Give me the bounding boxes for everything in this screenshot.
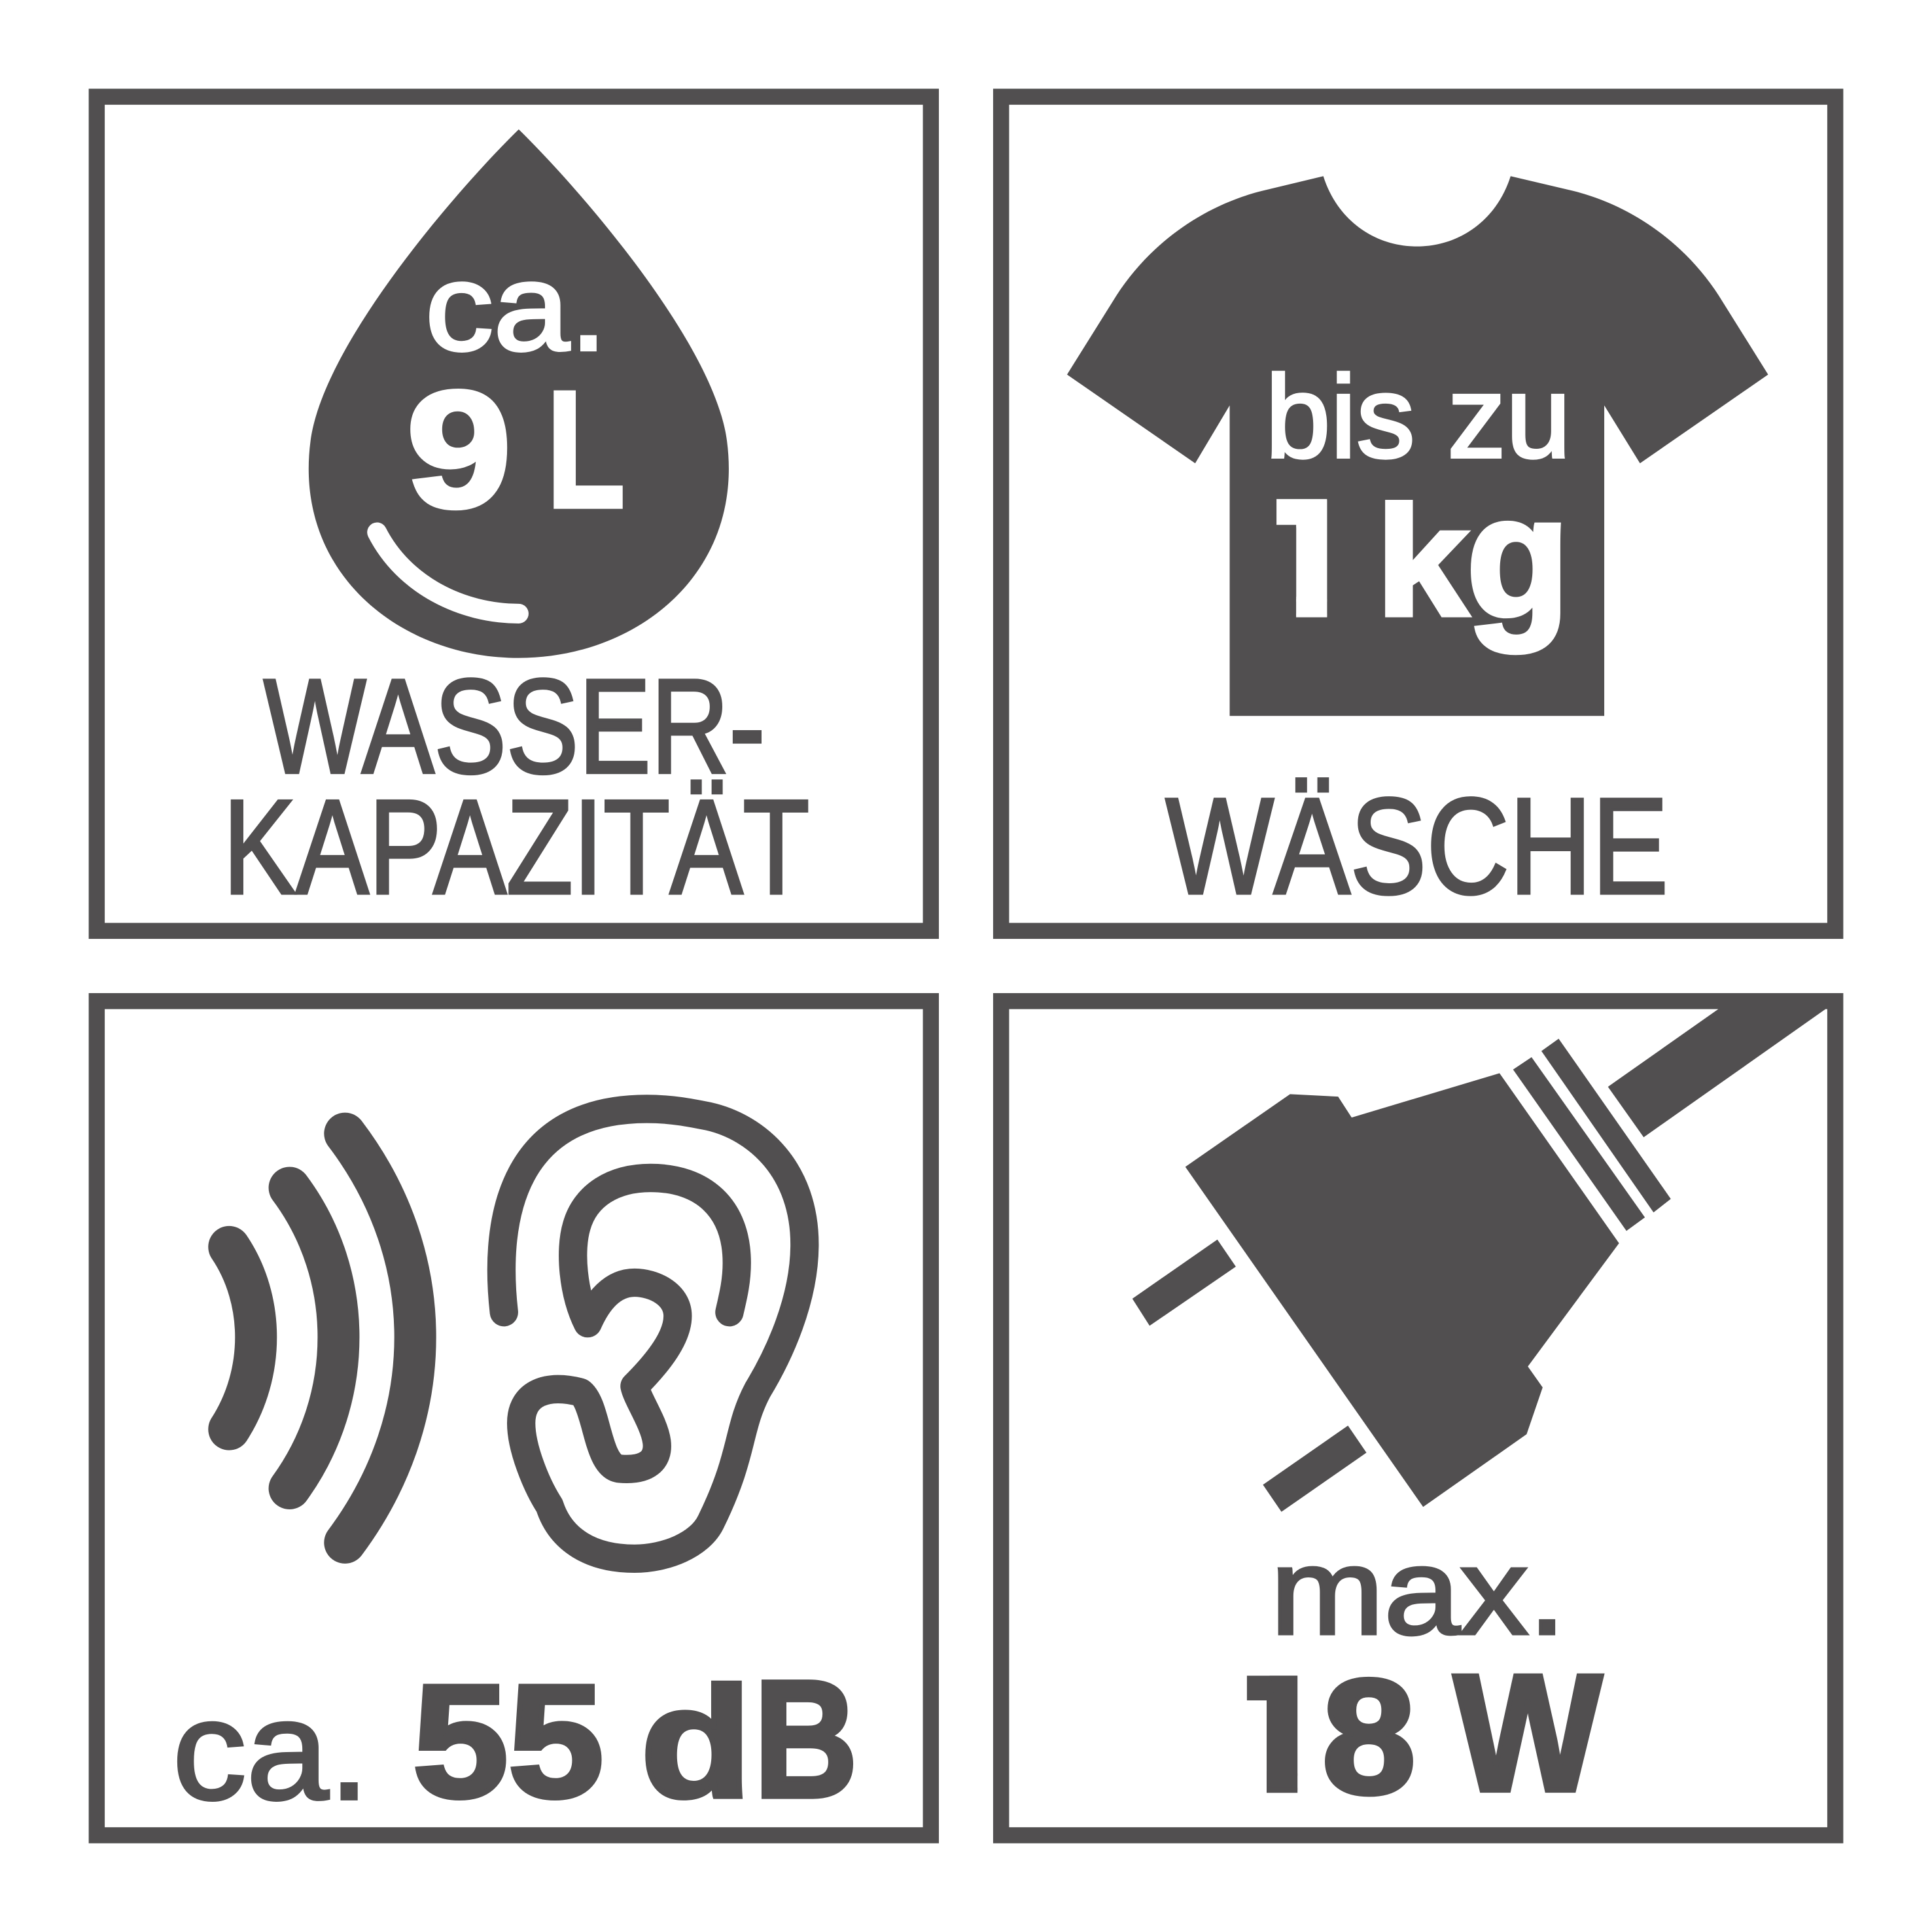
panel: water capacity — [97, 97, 931, 931]
text: bis zu 1 kg: 1 — [1259, 468, 1359, 652]
text: ca. 55 dB: B — [754, 1646, 858, 1832]
icon: sound waves — [229, 1134, 415, 1543]
text: ca. 55 dB — [173, 1646, 858, 1832]
text: bis zu 1 kg: bis zu — [1265, 351, 1571, 482]
text: ca. 9 L: ca. — [425, 238, 607, 377]
text: ca. 9 L: 9 — [406, 358, 512, 542]
text: max. 18 W — [1247, 1566, 1605, 1797]
icon: water drop — [309, 130, 729, 658]
panel: laundry — [1001, 97, 1835, 931]
text: ca. 9 L — [406, 238, 625, 542]
icon: t-shirt — [1067, 176, 1768, 716]
heading: Wäsche: WÄSCHE — [1166, 770, 1668, 922]
text: bis zu 1 kg — [1271, 370, 1565, 656]
text: ca. 55 dB: ca. — [173, 1671, 370, 1829]
text: max. 18 W: W — [1454, 1640, 1602, 1825]
text: max. 18 W: 1 — [1230, 1642, 1329, 1825]
icon: plug — [1133, 1008, 1827, 1512]
text: max. 18 W: 8 — [1322, 1645, 1416, 1827]
text: max. 18 W: max. — [1271, 1522, 1566, 1660]
icon: ear — [501, 1109, 805, 1558]
panel: noise level — [97, 1001, 931, 1835]
text: bis zu 1 kg: g — [1466, 460, 1570, 654]
text: bis zu 1 kg: k — [1377, 475, 1468, 648]
heading: Wasserkapazität: KAPAZITÄT — [223, 772, 809, 922]
text: ca. 9 L: L — [547, 358, 625, 542]
heading: Wasserkapazität: WASSER- — [264, 652, 765, 801]
panel: power — [1001, 1001, 1835, 1835]
heading: Wasserkapazität — [223, 652, 809, 922]
text: ca. 55 dB: 55 — [413, 1651, 604, 1831]
text: ca. 55 dB: d — [641, 1655, 752, 1830]
